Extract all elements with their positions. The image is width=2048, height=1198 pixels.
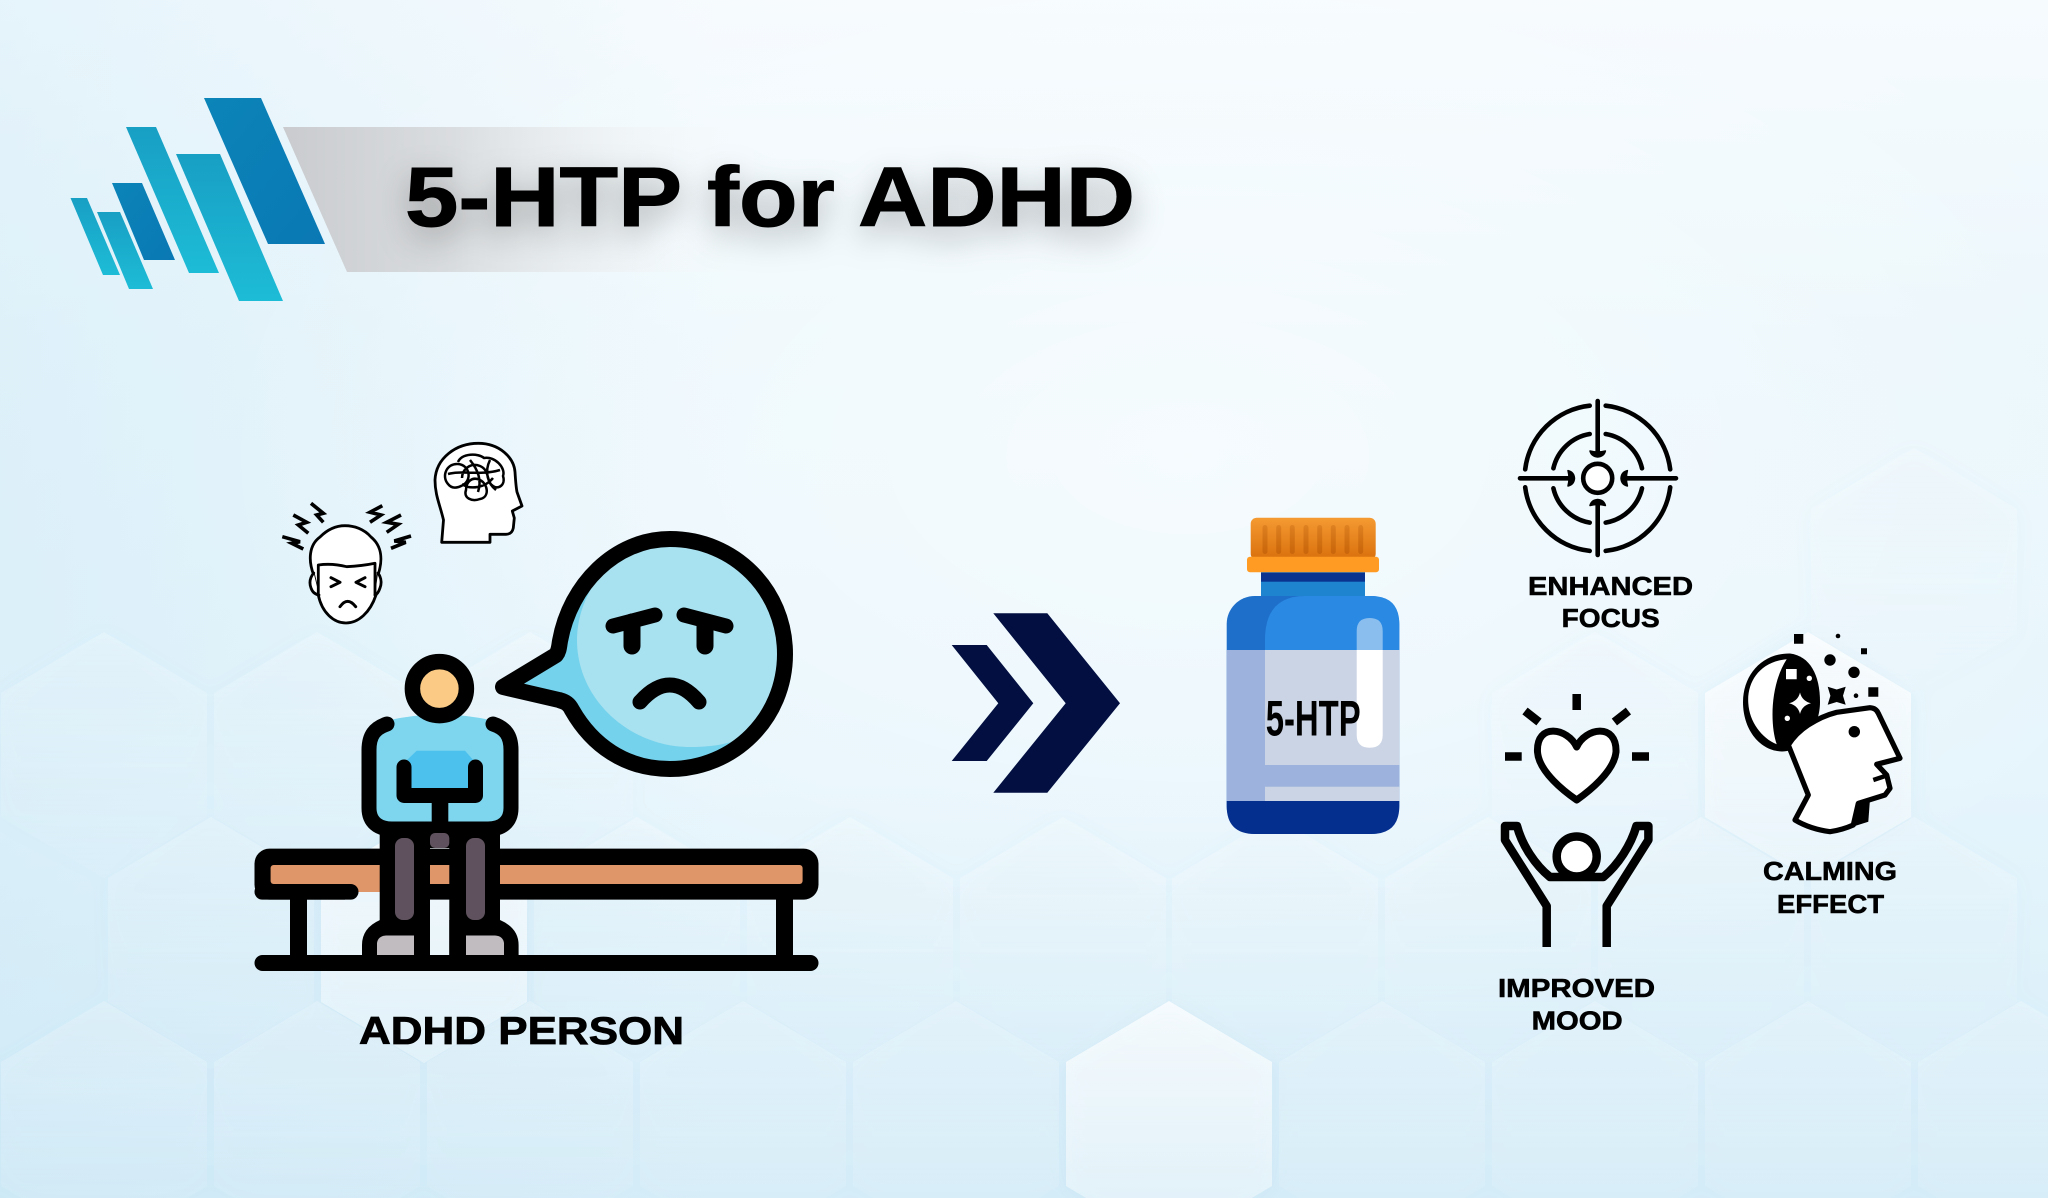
label: calming effect: EFFECT xyxy=(1777,889,1884,919)
heart rays xyxy=(1505,694,1649,756)
label: calming effect xyxy=(1763,856,1897,919)
chest xyxy=(405,751,475,790)
bottle body xyxy=(1227,596,1399,834)
label: enhanced focus: FOCUS xyxy=(1562,603,1660,633)
heart xyxy=(1537,731,1616,800)
label: improved mood: MOOD xyxy=(1532,1006,1623,1036)
highlight xyxy=(1357,618,1383,650)
sad eyes xyxy=(632,622,705,646)
icon: speech bubble sad face xyxy=(503,539,785,769)
title: 5-HTP for ADHD xyxy=(405,150,1135,244)
seated person xyxy=(362,662,519,958)
torso xyxy=(369,714,511,832)
bottle text: 5-HTP xyxy=(1266,691,1361,747)
torso outline xyxy=(369,724,511,829)
bench xyxy=(254,849,818,971)
icon: improved mood xyxy=(1505,694,1649,947)
head xyxy=(412,662,466,716)
label: improved mood: IMPROVED xyxy=(1498,973,1655,1003)
bottle label xyxy=(1227,650,1399,801)
sad face features xyxy=(613,615,726,702)
raised-arms figure xyxy=(1505,826,1648,947)
label: enhanced focus xyxy=(1528,571,1693,633)
feet xyxy=(362,920,519,958)
bottle cap xyxy=(1251,518,1376,560)
arm crease xyxy=(432,798,448,828)
label: enhanced focus: ENHANCED xyxy=(1528,571,1693,601)
hexagon pattern xyxy=(0,448,2048,1198)
legs xyxy=(380,826,500,955)
label: ADHD person: ADHD PERSON xyxy=(359,1010,684,1053)
bottle neck xyxy=(1261,572,1365,602)
icon: tangled brain head xyxy=(435,443,522,542)
icon: calming head xyxy=(1743,634,1900,832)
icon: focus target xyxy=(1520,401,1676,555)
icon: headache face xyxy=(282,503,411,623)
arrow: double chevron xyxy=(952,613,1120,793)
logo xyxy=(70,98,325,301)
crossed arms xyxy=(404,767,476,796)
label: calming effect: CALMING xyxy=(1763,856,1897,886)
title banner xyxy=(283,127,1150,272)
icon: 5-HTP bottle xyxy=(1227,518,1399,834)
label: improved mood xyxy=(1498,973,1655,1036)
